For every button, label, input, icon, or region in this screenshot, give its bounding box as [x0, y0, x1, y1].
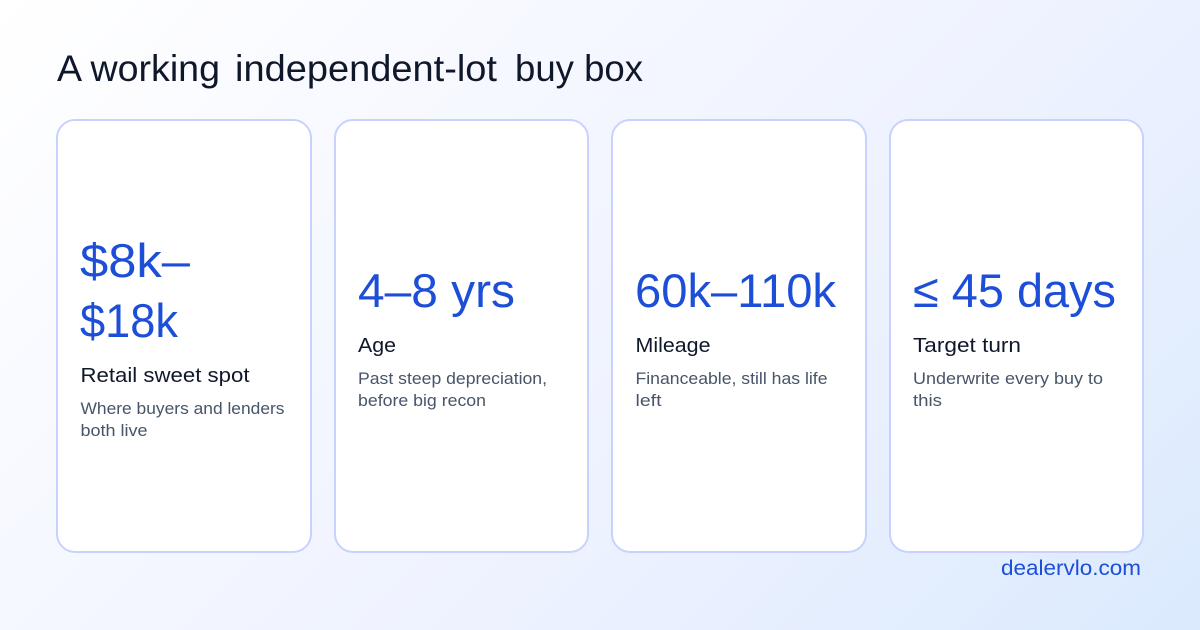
- value: price range: $8k–: [80, 234, 191, 287]
- description: retail sweet spot: Where buyers and lenders: [80, 400, 284, 418]
- description: mileage: Financeable, still has life: [636, 370, 828, 388]
- label: retail sweet spot: Retail sweet spot: [80, 364, 250, 387]
- description: age: Past steep depreciation,: [358, 370, 547, 388]
- label: age: Age: [358, 334, 396, 357]
- title: buy box: [515, 48, 643, 89]
- description: target turn: Underwrite every buy to: [913, 370, 1103, 388]
- panel: age: [335, 120, 588, 552]
- value: target days: ≤ 45 days: [913, 264, 1116, 317]
- description: target turn: [913, 370, 1103, 410]
- description: mileage: [636, 370, 828, 410]
- title: [57, 48, 643, 89]
- value: price range: $18k: [80, 294, 178, 347]
- title: A working: [57, 48, 220, 89]
- description: age: before big recon: [358, 392, 486, 410]
- brand footer: dealervlo.com: [1001, 556, 1141, 580]
- description: mileage: left: [636, 392, 662, 410]
- description: target turn: this: [913, 392, 942, 410]
- value: price range: [80, 234, 191, 347]
- label: target turn: Target turn: [913, 334, 1021, 357]
- panel: target turn: [890, 120, 1143, 552]
- description: age: [358, 370, 547, 410]
- title: independent-lot: [235, 48, 498, 89]
- panel: mileage: [612, 120, 866, 552]
- description: retail sweet spot: [80, 400, 284, 440]
- panel: retail sweet spot: [57, 120, 311, 552]
- value: age range: 4–8 yrs: [358, 264, 515, 317]
- value: mileage range: 60k–110k: [635, 264, 836, 317]
- label: mileage: Mileage: [636, 334, 710, 357]
- description: retail sweet spot: both live: [80, 422, 148, 440]
